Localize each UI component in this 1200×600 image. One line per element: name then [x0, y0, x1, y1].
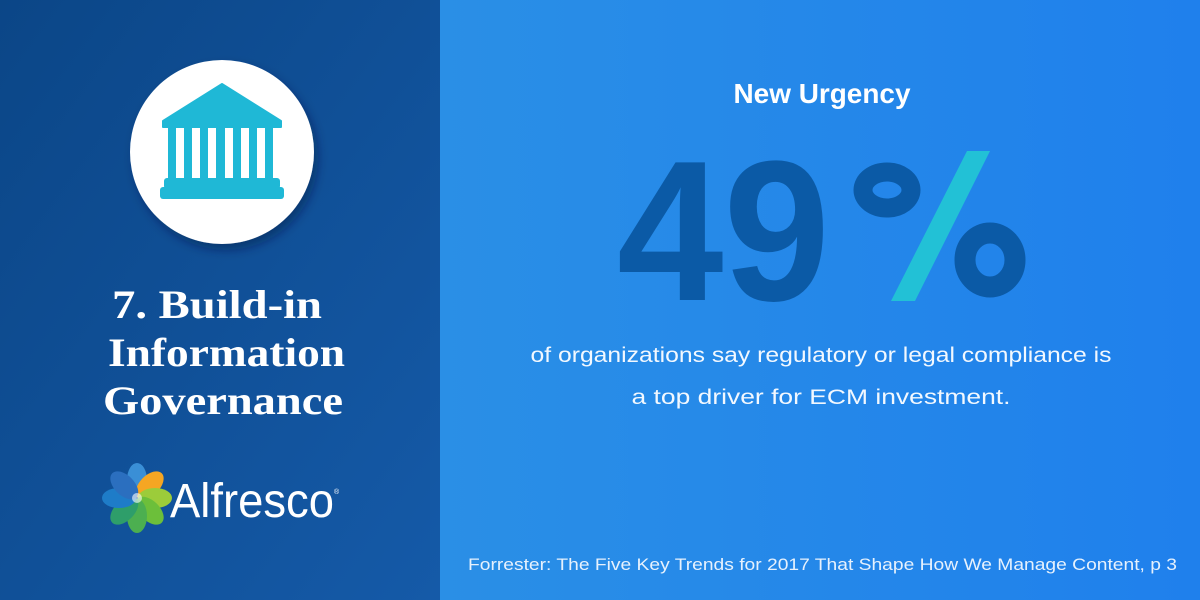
icon: courthouse in white circle: [130, 60, 314, 244]
panel: left: [0, 0, 440, 600]
title: 7. Build-in: [112, 282, 322, 327]
logo: Alfresco: ®: [334, 488, 340, 496]
title: Information: [108, 330, 345, 375]
heading: New Urgency: New Urgency: [734, 78, 911, 109]
text: description: a top driver for ECM investment.: [632, 386, 1010, 409]
logo: Alfresco: Alfresco: [170, 475, 334, 528]
big stat: 49%: [617, 120, 1015, 343]
title: Governance: [103, 378, 343, 423]
text: description: of organizations say regulatory or legal compliance is: [530, 344, 1112, 367]
title: [103, 282, 345, 423]
logo: Alfresco: [102, 463, 340, 533]
big stat: 49%: 49: [617, 120, 830, 343]
text: description: [530, 344, 1112, 409]
panel: right: [440, 0, 1200, 600]
source footnote: Forrester: The Five Key Trends for 2017 That Shape How We Manage Content, p 3: [468, 555, 1177, 574]
